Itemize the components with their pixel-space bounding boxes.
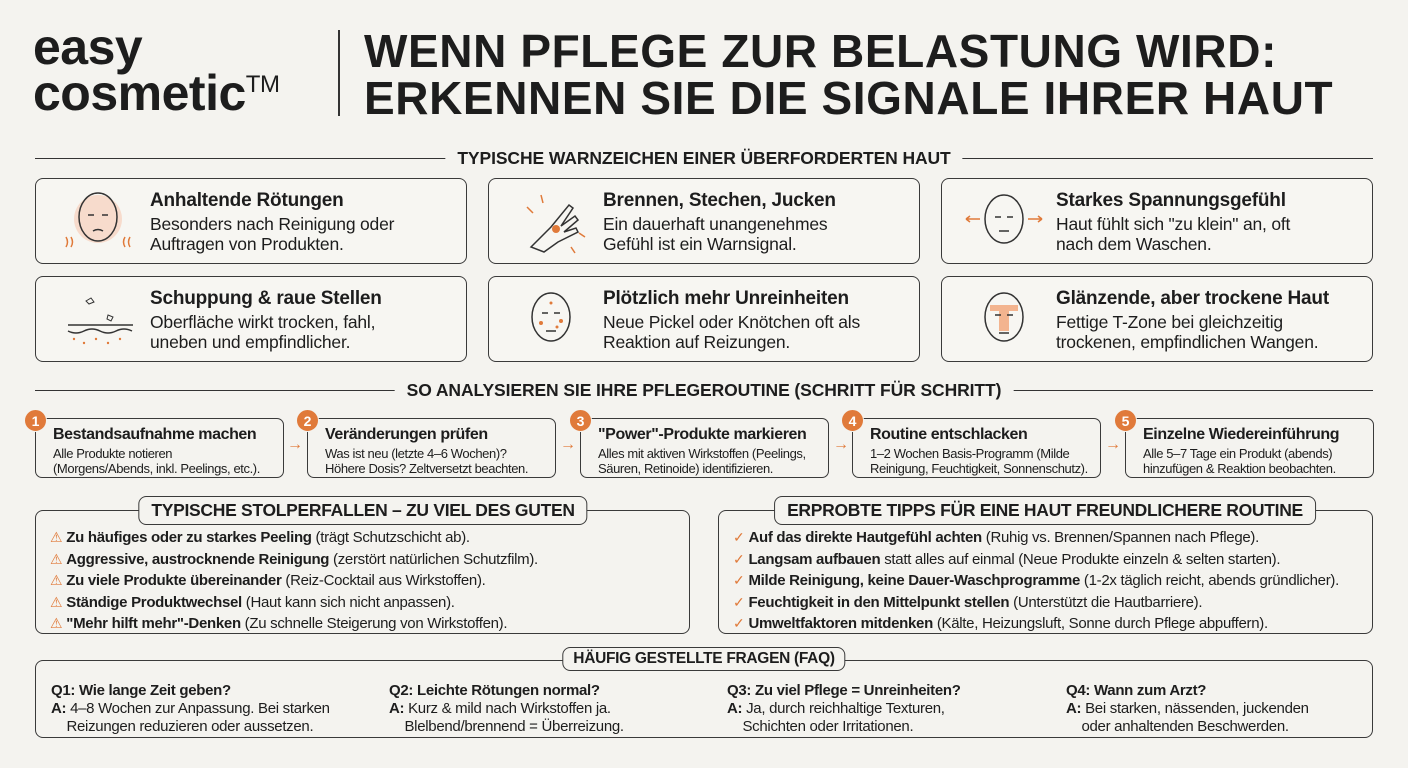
heading: analysis: SO ANALYSIEREN SIE IHRE PFLEGEROUTINE (SCHRITT FÜR SCHRITT) bbox=[407, 380, 1001, 400]
step 1: Alle Produkte notieren bbox=[53, 446, 172, 461]
card: Glänzende Haut: Glänzende, aber trockene Haut bbox=[1056, 288, 1329, 309]
step 4: Routine entschlacken bbox=[870, 426, 1027, 443]
faq 1: Reizungen reduzieren oder aussetzen. bbox=[66, 718, 313, 735]
card: Brennen: Ein dauerhaft unangenehmes bbox=[603, 214, 827, 234]
panel: tips bbox=[718, 510, 1373, 634]
tips list: ✓ Feuchtigkeit in den Mittelpunkt stellen (Unterstützt die Hautbarriere). bbox=[733, 594, 1202, 610]
icon: tight face bbox=[966, 194, 1042, 244]
title: WENN PFLEGE ZUR BELASTUNG WIRD: bbox=[364, 25, 1277, 77]
step 5: Alle 5–7 Tage ein Produkt (abends) bbox=[1143, 446, 1332, 461]
icon: T-zone face bbox=[984, 292, 1024, 342]
card: Rötungen: Auftragen von Produkten. bbox=[150, 234, 344, 254]
step 2 bbox=[307, 418, 556, 478]
card: Schuppung: Oberfläche wirkt trocken, fahl, bbox=[150, 312, 375, 332]
step 1: (Morgens/Abends, inkl. Peelings, etc.). bbox=[53, 461, 260, 476]
step 4: 1–2 Wochen Basis-Programm (Milde bbox=[870, 446, 1069, 461]
title: ERKENNEN SIE DIE SIGNALE IHRER HAUT bbox=[364, 72, 1333, 124]
logo: cosmeticTM bbox=[33, 65, 279, 121]
faq 3: Q3: Zu viel Pflege = Unreinheiten? bbox=[727, 682, 961, 699]
card: Spannung: nach dem Waschen. bbox=[1056, 234, 1211, 254]
faq 4 bbox=[1066, 682, 1309, 735]
heading: tips bbox=[774, 496, 1316, 525]
step 3 bbox=[580, 418, 829, 478]
faq 2: A: Kurz & mild nach Wirkstoffen ja. bbox=[389, 700, 611, 717]
step 3: 3 bbox=[577, 413, 584, 429]
card: Brennen bbox=[488, 178, 920, 264]
heading: tips: ERPROBTE TIPPS FÜR EINE HAUT FREUNDLICHERE ROUTINE bbox=[787, 500, 1303, 520]
heading: warning signs: TYPISCHE WARNZEICHEN EINER ÜBERFORDERTEN HAUT bbox=[457, 148, 951, 168]
faq 1: A: 4–8 Wochen zur Anpassung. Bei starken bbox=[51, 700, 330, 717]
tips list: ✓ Langsam aufbauen statt alles auf einmal (Neue Produkte einzeln & selten starten). bbox=[733, 550, 1280, 568]
faq 1 bbox=[51, 682, 330, 735]
arrow: → bbox=[560, 436, 576, 453]
arrow: → bbox=[1105, 436, 1121, 453]
tips list: ✓ Auf das direkte Hautgefühl achten (Ruhig vs. Brennen/Spannen nach Pflege). bbox=[733, 529, 1259, 546]
step 5 bbox=[1125, 418, 1374, 478]
faq 1: Q1: Wie lange Zeit geben? bbox=[51, 682, 231, 699]
step 4: 4 bbox=[849, 413, 856, 429]
step 1: 1 bbox=[32, 413, 39, 429]
card: Unreinheiten: Plötzlich mehr Unreinheiten bbox=[603, 288, 849, 309]
card: Glänzende Haut bbox=[941, 276, 1373, 362]
faq 4: Q4: Wann zum Arzt? bbox=[1066, 682, 1206, 699]
tips list: ✓ Milde Reinigung, keine Dauer-Waschprogramme (1-2x täglich reicht, abends gründlicher). bbox=[733, 572, 1339, 589]
pitfalls list: ⚠ Aggressive, austrocknende Reinigung (zerstört natürlichen Schutzfilm). bbox=[50, 550, 538, 568]
heading: FAQ bbox=[562, 647, 846, 671]
card: Schuppung bbox=[35, 276, 467, 362]
step 5: hinzufügen & Reaktion beobachten. bbox=[1143, 461, 1336, 476]
step 2: Höhere Dosis? Zeltversetzt beachten. bbox=[325, 461, 528, 476]
divider bbox=[338, 30, 340, 116]
card: Brennen: Gefühl ist ein Warnsignal. bbox=[603, 234, 797, 254]
step 2: 2 bbox=[304, 413, 311, 429]
arrow: → bbox=[287, 436, 303, 453]
step 2: Veränderungen prüfen bbox=[325, 426, 488, 443]
card: Spannung bbox=[941, 178, 1373, 264]
faq 3: A: Ja, durch reichhaltige Texturen, bbox=[727, 700, 945, 717]
card: Glänzende Haut: Fettige T-Zone bei gleichzeitig bbox=[1056, 312, 1283, 332]
faq 4: oder anhaltenden Beschwerden. bbox=[1081, 718, 1289, 735]
card: Unreinheiten bbox=[488, 276, 920, 362]
card: Spannung: Haut fühlt sich "zu klein" an, oft bbox=[1056, 214, 1290, 234]
card: Unreinheiten: Reaktion auf Reizungen. bbox=[603, 332, 790, 352]
panel: FAQ bbox=[35, 660, 1373, 738]
card: Unreinheiten: Neue Pickel oder Knötchen oft als bbox=[603, 312, 860, 332]
card: Rötungen bbox=[35, 178, 467, 264]
tips list bbox=[733, 529, 1339, 632]
faq 4: A: Bei starken, nässenden, juckenden bbox=[1066, 700, 1309, 717]
tips list: ✓ Umweltfaktoren mitdenken (Kälte, Heizungsluft, Sonne durch Pflege abpuffern). bbox=[733, 615, 1268, 632]
panel: pitfalls bbox=[35, 510, 690, 634]
pitfalls list: ⚠ Ständige Produktwechsel (Haut kann sich nicht anpassen). bbox=[50, 594, 455, 610]
pitfalls list: ⚠ Zu viele Produkte übereinander (Reiz-Cocktail aus Wirkstoffen). bbox=[50, 572, 486, 589]
card: Spannung: Starkes Spannungsgefühl bbox=[1056, 190, 1286, 211]
icon: face with pimples bbox=[531, 292, 571, 342]
step 3: "Power"-Produkte markieren bbox=[598, 426, 806, 443]
faq 3 bbox=[727, 682, 961, 735]
pitfalls list bbox=[50, 529, 538, 632]
card: Schuppung: uneben und empfindlicher. bbox=[150, 332, 350, 352]
step 1: Bestandsaufnahme machen bbox=[53, 426, 256, 443]
step 4: Reinigung, Feuchtigkeit, Sonnenschutz). bbox=[870, 461, 1088, 476]
faq 3: Schichten oder Irritationen. bbox=[742, 718, 913, 735]
pitfalls list: ⚠ "Mehr hilft mehr"-Denken (Zu schnelle Steigerung von Wirkstoffen). bbox=[50, 615, 507, 632]
card: Brennen: Brennen, Stechen, Jucken bbox=[603, 190, 836, 211]
arrow: → bbox=[833, 436, 849, 453]
logo bbox=[33, 19, 279, 121]
title bbox=[364, 25, 1333, 124]
step 2: Was ist neu (letzte 4–6 Wochen)? bbox=[325, 446, 507, 461]
icon: flaking skin bbox=[68, 297, 133, 344]
card: Rötungen: Besonders nach Reinigung oder bbox=[150, 214, 394, 234]
faq 2: Blelbend/brennend = Überreizung. bbox=[404, 718, 624, 735]
heading: pitfalls bbox=[138, 496, 588, 525]
icon: hand bbox=[526, 194, 586, 254]
logo: easy bbox=[33, 19, 142, 75]
step 5: Einzelne Wiedereinführung bbox=[1143, 426, 1339, 443]
faq 2 bbox=[389, 682, 624, 735]
step 3: Alles mit aktiven Wirkstoffen (Peelings, bbox=[598, 446, 806, 461]
step 4 bbox=[852, 418, 1101, 478]
faq 2: Q2: Leichte Rötungen normal? bbox=[389, 682, 600, 699]
heading: pitfalls: TYPISCHE STOLPERFALLEN – ZU VIEL DES GUTEN bbox=[151, 500, 575, 520]
card: Glänzende Haut: trockenen, empfindlichen Wangen. bbox=[1056, 332, 1318, 352]
card: Schuppung: Schuppung & raue Stellen bbox=[150, 288, 382, 309]
pitfalls list: ⚠ Zu häufiges oder zu starkes Peeling (trägt Schutzschicht ab). bbox=[50, 529, 470, 546]
card: Rötungen: Anhaltende Rötungen bbox=[150, 190, 344, 211]
icon: red face bbox=[65, 192, 131, 248]
step 1 bbox=[35, 418, 284, 478]
heading: FAQ: HÄUFIG GESTELLTE FRAGEN (FAQ) bbox=[573, 650, 835, 667]
step 3: Säuren, Retinoide) identifizieren. bbox=[598, 461, 773, 476]
step 5: 5 bbox=[1122, 413, 1129, 429]
